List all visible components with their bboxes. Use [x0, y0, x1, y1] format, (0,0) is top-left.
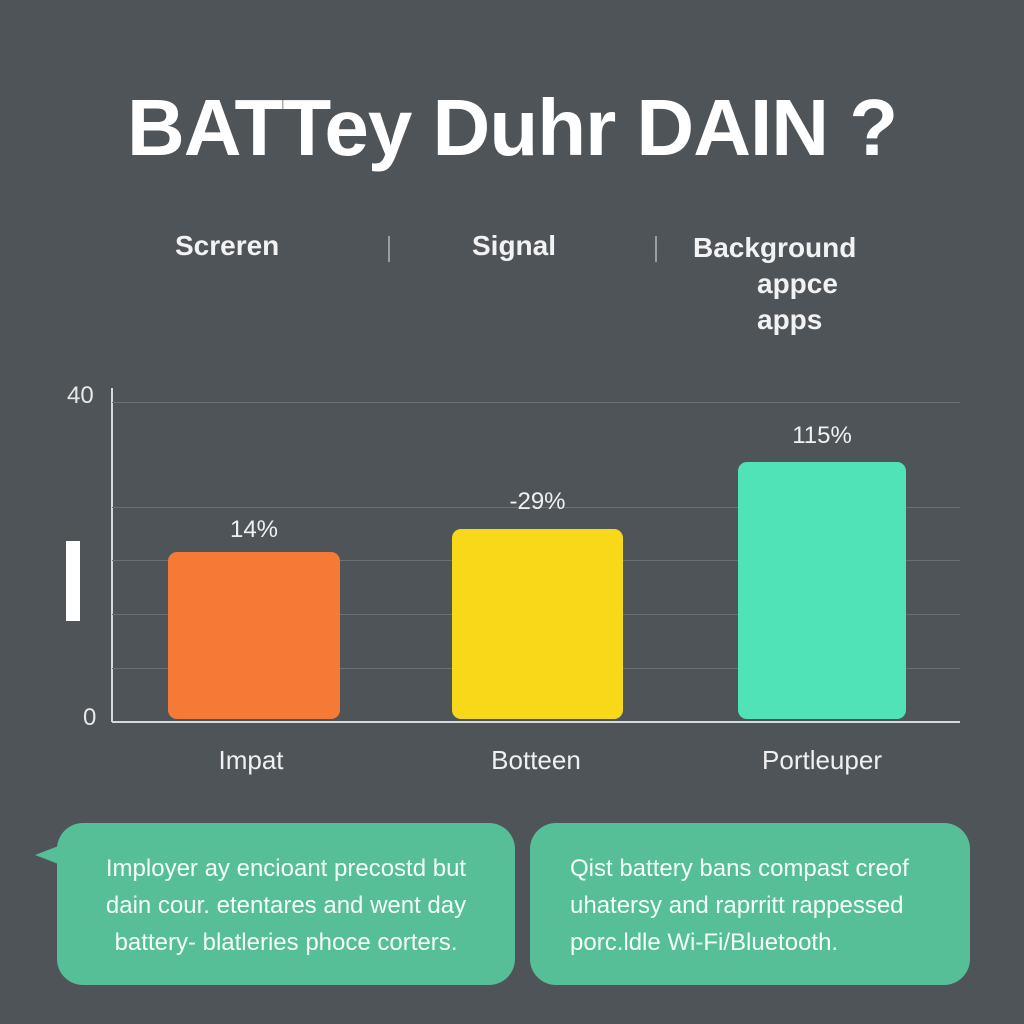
callout: right: uhatersy and raprritt rappessed: [570, 892, 904, 919]
heading: Background apps: apps: [757, 304, 822, 335]
heading: Screren: Screren: [175, 230, 279, 261]
bar: Botteen: [452, 529, 623, 719]
callout: right: porc.ldle Wi-Fi/Bluetooth.: [570, 929, 838, 956]
x labels: Impat: [218, 745, 284, 775]
heading: Background apps: Background: [693, 232, 856, 263]
heading: Background apps: [693, 232, 856, 335]
bar chart: 0: [83, 704, 96, 731]
title: BATTey Duhr DAIN ?: [127, 83, 897, 172]
x labels: Portleuper: [762, 745, 882, 775]
bar chart: 40: [67, 382, 94, 409]
bar: Impat: [168, 552, 340, 719]
x labels: [218, 745, 882, 775]
callout: left: [57, 823, 515, 985]
callout: left: Imployer ay encioant precostd but: [106, 855, 466, 882]
bar chart: 14%: [230, 516, 278, 543]
heading: Signal: Signal: [472, 230, 556, 261]
callout: left: dain cour. etentares and went day: [106, 892, 466, 919]
callout: left: battery- blatleries phoce corters.: [115, 929, 457, 956]
bar chart: [66, 382, 960, 731]
bar chart: 115%: [792, 422, 852, 449]
x labels: Botteen: [491, 745, 581, 775]
callout: right: Qist battery bans compast creof: [570, 855, 909, 882]
bar: Portleuper: [738, 462, 906, 719]
heading: Background apps: appce: [757, 268, 838, 299]
bar chart: -29%: [509, 488, 566, 515]
callout: right: [530, 823, 970, 985]
